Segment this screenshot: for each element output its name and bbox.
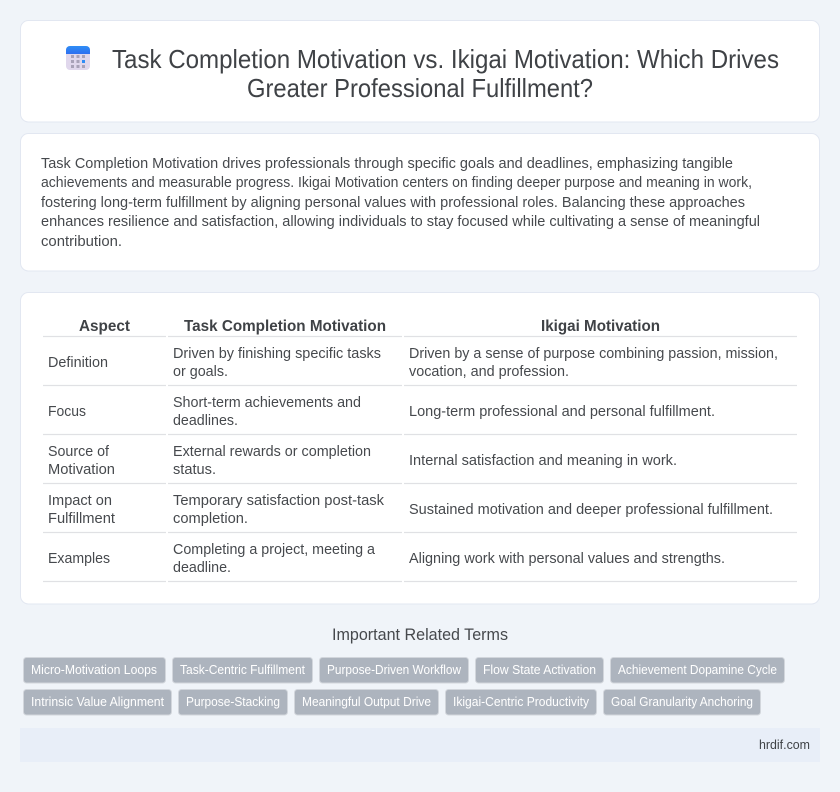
tag [172, 658, 312, 683]
table row: examples: Examples [48, 551, 110, 567]
tag [24, 690, 172, 715]
table header row: Ikigai Motivation [541, 318, 660, 335]
table row: examples: deadline. [173, 560, 231, 576]
table row: source of motivation [48, 444, 677, 478]
table row: source of motivation: Internal satisfaction and meaning in work. [409, 453, 677, 469]
text block: summary: contribution. [41, 234, 122, 250]
text block: summary [41, 156, 760, 250]
tag [604, 690, 760, 715]
tag: Task-Centric Fulfillment [180, 663, 305, 677]
tag: Meaningful Output Drive [302, 695, 431, 709]
icon: calendar [66, 46, 90, 70]
table row: focus: Short-term achievements and [173, 395, 361, 411]
table row: focus: Long-term professional and personal fulfillment. [409, 404, 715, 420]
table header row: Aspect [79, 318, 131, 335]
title [112, 44, 779, 103]
tag: Achievement Dopamine Cycle [618, 663, 777, 677]
tag: Micro-Motivation Loops [31, 663, 157, 677]
tag [320, 658, 468, 683]
panel: header [20, 20, 820, 122]
footer [20, 728, 820, 762]
table row: definition [48, 346, 778, 380]
tag [476, 658, 604, 683]
table row: impact on fulfillment: Temporary satisfaction post-task [173, 493, 385, 509]
table header row: Task Completion Motivation [184, 318, 386, 335]
tag: Intrinsic Value Alignment [31, 695, 164, 709]
table row: impact on fulfillment [48, 493, 773, 527]
table row: focus [48, 395, 715, 429]
title: Greater Professional Fulfillment? [247, 73, 593, 103]
heading: important related terms: Important Related Terms [332, 626, 508, 644]
tag [446, 690, 596, 715]
table row: definition: Driven by a sense of purpose combining passion, mission, [409, 346, 778, 362]
table row: definition: Definition [48, 355, 108, 371]
panel: summary description [20, 134, 820, 271]
table row: impact on fulfillment: Fulfillment [48, 511, 115, 527]
table row: definition: or goals. [173, 364, 228, 380]
table row: examples [48, 542, 725, 576]
table row: impact on fulfillment: Impact on [48, 493, 112, 509]
tag: Purpose-Stacking [186, 695, 280, 709]
table row: source of motivation: Source of [48, 444, 110, 460]
text block: summary: enhances resilience and satisfaction, allowing individuals to stay focused while cultivating a sense of meaningful [41, 214, 760, 230]
table row: source of motivation: Motivation [48, 462, 115, 478]
table row: focus: Focus [48, 404, 86, 420]
table header row [79, 318, 660, 335]
tag [610, 658, 784, 683]
tag: Flow State Activation [483, 663, 596, 677]
table row: definition: vocation, and profession. [409, 364, 569, 380]
text block: summary: achievements and measurable progress. Ikigai Motivation centers on finding deeper purpose and meaning in work, [41, 175, 752, 191]
text block: summary: fostering long-term fulfillment by aligning personal values with professional roles. Balancing these approaches [41, 195, 745, 211]
table row: definition: Driven by finishing specific tasks [173, 346, 381, 362]
tag [24, 658, 166, 683]
table row: examples: Completing a project, meeting a [173, 542, 376, 558]
title: Task Completion Motivation vs. Ikigai Motivation: Which Drives [112, 44, 779, 74]
table row: source of motivation: status. [173, 462, 216, 478]
tag: Goal Granularity Anchoring [611, 695, 753, 709]
table row: impact on fulfillment: Sustained motivation and deeper professional fulfillment. [409, 502, 773, 518]
text block: summary: Task Completion Motivation drives professionals through specific goals and deadlines, emphasizing tangible [41, 156, 733, 172]
table row: source of motivation: External rewards or completion [173, 444, 371, 460]
related terms tags [24, 658, 784, 715]
tag: Purpose-Driven Workflow [327, 663, 462, 677]
table row: focus: deadlines. [173, 413, 238, 429]
table row: examples: Aligning work with personal values and strengths. [409, 551, 725, 567]
tag: Ikigai-Centric Productivity [453, 695, 590, 709]
tag [178, 690, 288, 715]
tag [294, 690, 438, 715]
panel: comparison table [20, 292, 820, 604]
footer: hrdif.com [759, 737, 810, 752]
table row: impact on fulfillment: completion. [173, 511, 248, 527]
